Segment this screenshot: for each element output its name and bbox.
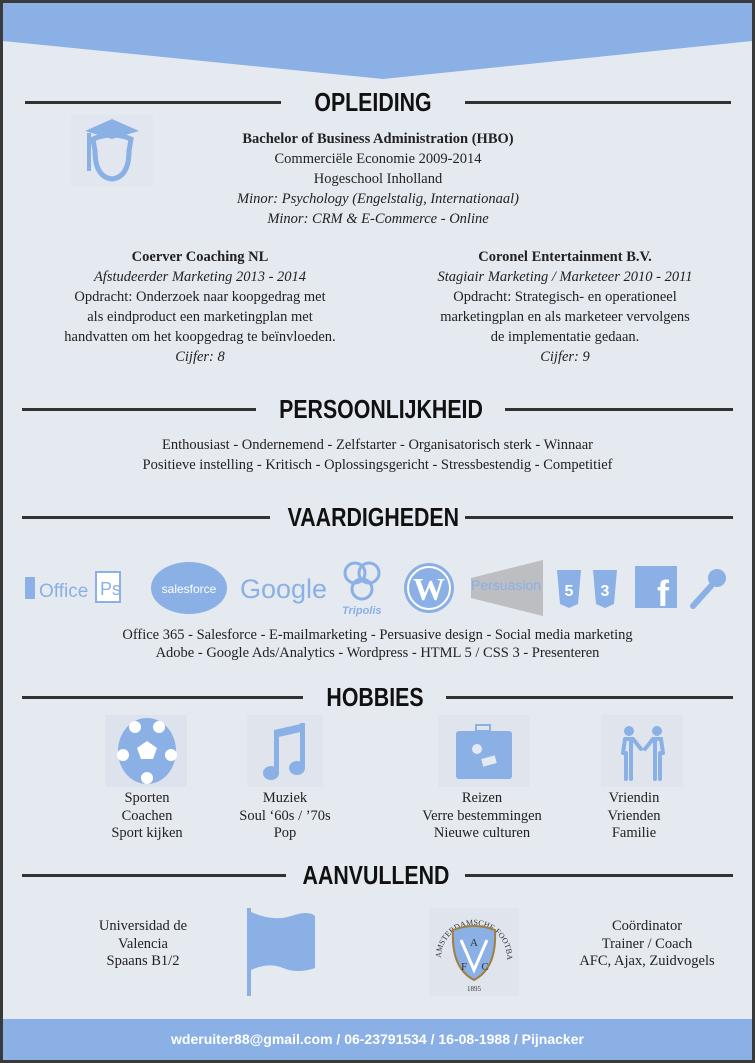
text: reizen [422, 790, 542, 841]
text: coronel [437, 249, 693, 365]
text: reizen: Nieuwe culturen [434, 825, 530, 841]
text: bachelor: Minor: Psychology (Engelstalig, Internationaal) [237, 191, 519, 207]
heading: opleiding: OPLEIDING [314, 87, 432, 117]
icons: skills: f [657, 573, 670, 614]
heading: opleiding [25, 87, 731, 117]
text: coronel: de implementatie gedaan. [491, 329, 639, 345]
text: bachelor: Minor: CRM & E-Commerce - Online [267, 211, 489, 227]
text: valencia: Valencia [118, 936, 168, 952]
icons: skills: 3 [601, 583, 610, 600]
text: coronel: Coronel Entertainment B.V. [478, 249, 652, 265]
text: muziek: Soul ‘60s / ’70s [239, 808, 331, 824]
text: valencia: Universidad de [99, 918, 187, 934]
text: coerver: als eindproduct een marketingplan met [87, 309, 313, 325]
text: coerver: Cijfer: 8 [175, 349, 225, 365]
icon: music [263, 723, 305, 780]
text: muziek: Muziek [263, 790, 307, 806]
icons: skills: Persuasion [471, 577, 541, 593]
text: sporten: Sport kijken [111, 825, 183, 841]
icon: afc logo: C [481, 961, 489, 973]
icon: afc logo: F [461, 961, 467, 973]
text: sporten [111, 790, 183, 841]
icons: skills: 5 [565, 583, 574, 600]
text: coronel: Stagiair Marketing / Marketeer 2010 - 2011 [437, 269, 693, 285]
icons: skills: Tripolis [342, 605, 382, 617]
heading: vaardigheden [22, 502, 733, 532]
footer [3, 1019, 752, 1060]
text: persoonlijkheid: Enthousiast - Ondernemend - Zelfstarter - Organisatorisch sterk - Winnaar [162, 437, 593, 453]
text: skills: Adobe - Google Ads/Analytics - Wordpress - HTML 5 / CSS 3 - Presenteren [156, 644, 599, 660]
text: coordinator: Trainer / Coach [602, 936, 692, 952]
text: coordinator: AFC, Ajax, Zuidvogels [579, 953, 715, 969]
icons: skills: salesforce [162, 582, 217, 596]
icon: afc logo: 1895 [467, 985, 482, 993]
heading: aanvullend [22, 860, 733, 890]
icon: friends [621, 726, 665, 781]
text: valencia [99, 918, 187, 969]
text: coronel: marketingplan en als marketeer vervolgens [440, 309, 690, 325]
text: bachelor: Commerciële Economie 2009-2014 [274, 151, 481, 167]
text: vriendin [607, 790, 661, 841]
icon: suitcase [456, 724, 512, 779]
icon: afc logo [436, 920, 512, 993]
text: sporten: Coachen [122, 808, 172, 824]
text: vriendin: Familie [612, 825, 656, 841]
heading: hobbies: HOBBIES [326, 682, 424, 712]
text: vriendin: Vrienden [607, 808, 661, 824]
text: skills [122, 627, 633, 660]
text: persoonlijkheid [142, 437, 612, 473]
text: skills: Office 365 - Salesforce - E-mailmarketing - Persuasive design - Social media marketing [122, 627, 633, 643]
text: muziek [239, 790, 331, 841]
text: coerver: Afstudeerder Marketing 2013 - 2014 [94, 269, 306, 285]
icon: afc logo: A [470, 937, 478, 949]
icons: skills: W [413, 571, 445, 607]
text: bachelor: Hogeschool Inholland [314, 171, 442, 187]
icon: flag [247, 908, 315, 996]
icon: graduate [85, 119, 139, 182]
text: coerver: Coerver Coaching NL [132, 249, 268, 265]
text: reizen: Reizen [462, 790, 502, 806]
header banner [3, 3, 752, 79]
heading: aanvullend: AANVULLEND [303, 860, 449, 890]
text: persoonlijkheid: Positieve instelling - Kritisch - Oplossingsgericht - Stressbestendig - Competitief [142, 457, 612, 473]
icons: skills [25, 560, 726, 617]
heading: persoonlijkheid [22, 394, 733, 424]
text: coerver: handvatten om het koopgedrag te beïnvloeden. [64, 329, 336, 345]
text: valencia: Spaans B1/2 [107, 953, 179, 969]
text: coordinator [579, 918, 715, 969]
icon: soccer ball [117, 718, 177, 784]
footer: wderuiter88@gmail.com / 06-23791534 / 16-08-1988 / Pijnacker [171, 1031, 584, 1047]
text: reizen: Verre bestemmingen [422, 808, 542, 824]
text: bachelor: Bachelor of Business Administration (HBO) [242, 131, 514, 147]
icons: skills: Google [240, 574, 327, 604]
text: muziek: Pop [274, 825, 296, 841]
heading: hobbies [22, 682, 733, 712]
icons: skills: Ps [100, 579, 121, 599]
text: coordinator: Coördinator [612, 918, 682, 934]
heading: vaardigheden: VAARDIGHEDEN [288, 502, 459, 532]
text: coronel: Opdracht: Strategisch- en operationeel [453, 289, 677, 305]
text: coronel: Cijfer: 9 [540, 349, 590, 365]
text: sporten: Sporten [124, 790, 170, 806]
text: coerver [64, 249, 336, 365]
text: coerver: Opdracht: Onderzoek naar koopgedrag met [74, 289, 326, 305]
text: bachelor [236, 131, 519, 227]
text: vriendin: Vriendin [609, 790, 659, 806]
heading: persoonlijkheid: PERSOONLIJKHEID [279, 394, 483, 424]
icons: skills: Office [39, 581, 88, 602]
